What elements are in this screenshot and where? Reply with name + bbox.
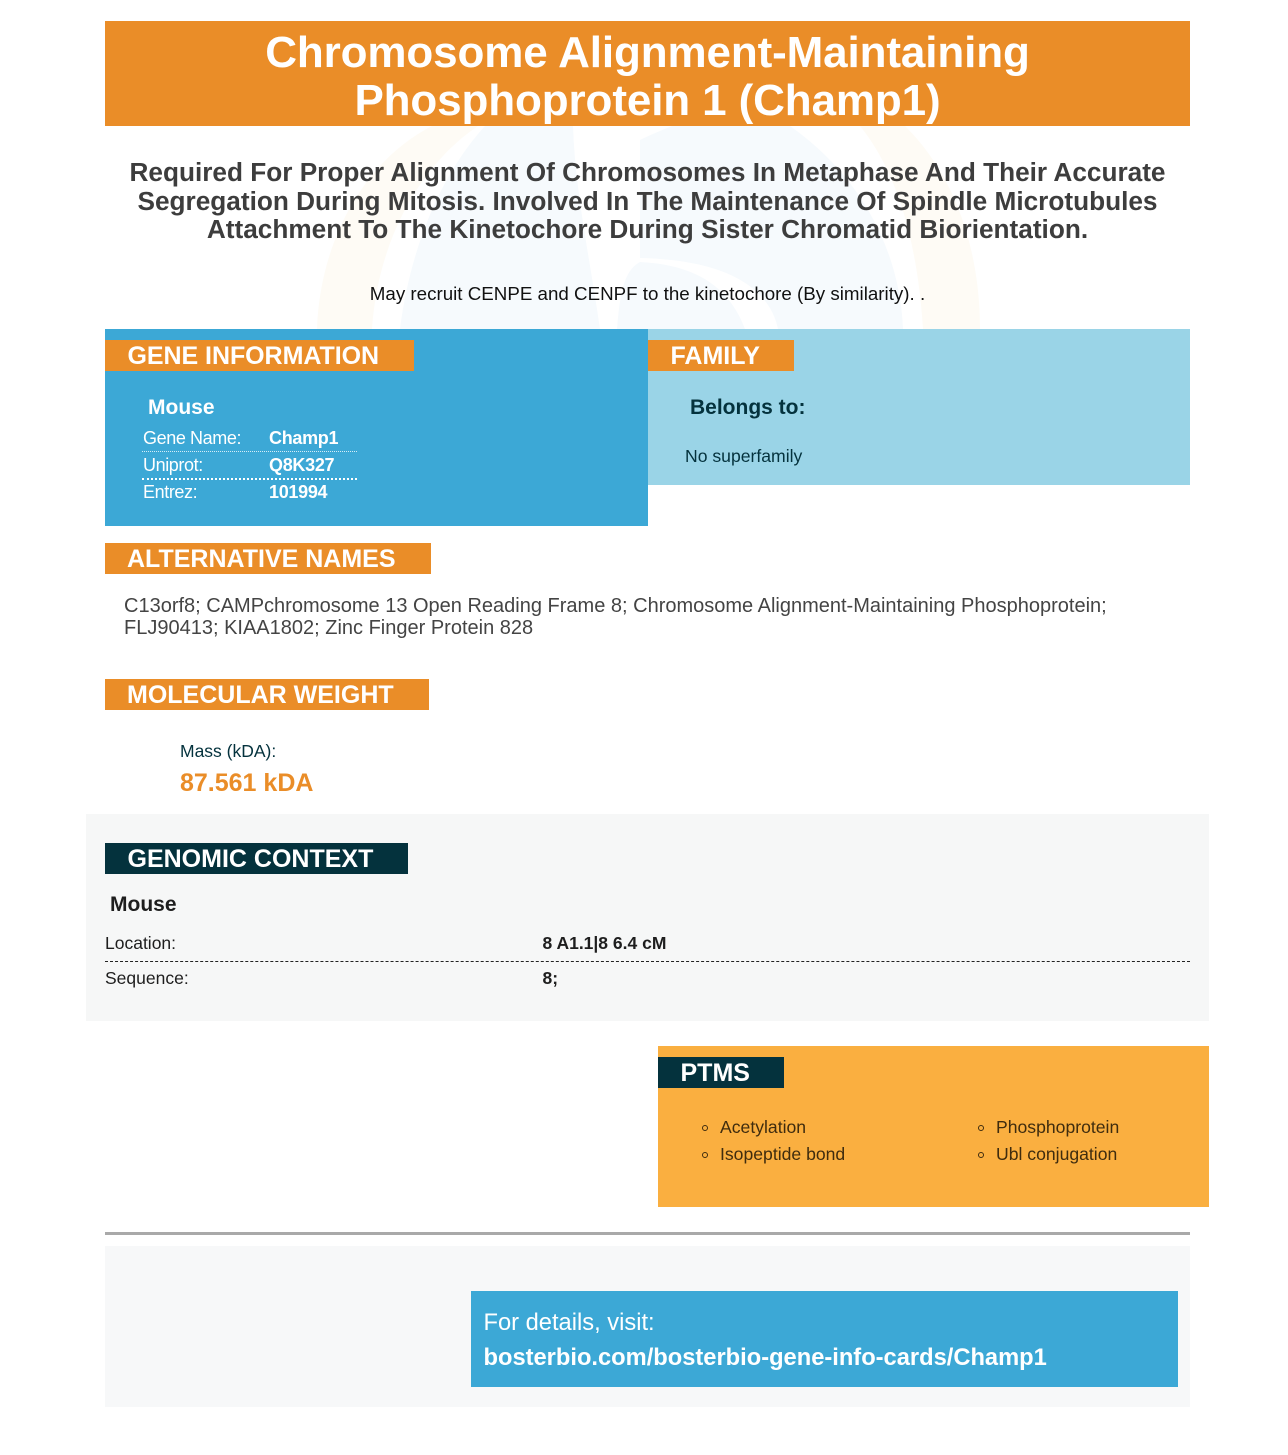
item: phosphoprotein: Phosphoprotein (996, 1117, 1119, 1137)
item: ubl conjugation: Ubl conjugation (996, 1144, 1117, 1164)
details URL: bosterbio.com/bosterbio-gene-info-cards/Champ1 (484, 1344, 1047, 1370)
gene detail table: Uniprot: (143, 455, 203, 475)
heading: molecular weight: MOLECULAR WEIGHT (127, 681, 394, 709)
heading: PTMs: PTMS (680, 1059, 750, 1087)
panel: gene information (105, 329, 648, 526)
gene detail table (142, 428, 357, 502)
gene detail table: Champ1 (269, 428, 338, 448)
heading: family: FAMILY (670, 342, 760, 370)
PTM list (702, 1117, 1119, 1164)
gene detail table: Entrez: (143, 482, 197, 502)
heading: alternative names: ALTERNATIVE NAMES (127, 545, 396, 573)
species label: Mouse (148, 396, 215, 419)
heading: PTMs (658, 1057, 784, 1088)
alternative names text (124, 595, 1107, 639)
genomic sequence row (105, 968, 558, 988)
title banner (105, 21, 1190, 126)
item: isopeptide bond: Isopeptide bond (720, 1144, 845, 1164)
title banner: Chromosome Alignment-Maintaining (265, 28, 1030, 77)
species label: Mouse (110, 893, 177, 916)
call to action box (471, 1291, 1178, 1387)
gene detail table: Gene Name: (143, 428, 241, 448)
function summary heading (129, 157, 1166, 244)
background watermark logo (317, 126, 980, 329)
item: acetylation: Acetylation (720, 1117, 806, 1137)
gene detail table: Q8K327 (269, 455, 334, 475)
gene detail table: 101994 (269, 482, 327, 502)
genomic location row: Location: (105, 933, 176, 953)
genomic location row (105, 933, 1190, 962)
function summary heading: Attachment To The Kinetochore During Sister Chromatid Biorientation. (207, 214, 1088, 244)
mass label: Mass (kDA): (180, 741, 276, 761)
superfamily value: No superfamily (685, 446, 802, 466)
footer panel (105, 1246, 1190, 1407)
genomic sequence row: Sequence: (105, 968, 189, 988)
title banner: Phosphoprotein 1 (Champ1) (354, 76, 941, 124)
belongs to label: Belongs to: (690, 396, 806, 419)
alternative names text: C13orf8; CAMPchromosome 13 Open Reading Frame 8; Chromosome Alignment-Maintaining Phosphoprotein; (124, 595, 1107, 617)
panel: PTMs (658, 1046, 1209, 1207)
function summary heading: Segregation During Mitosis. Involved In The Maintenance Of Spindle Microtubules (138, 186, 1157, 216)
heading: gene information: GENE INFORMATION (128, 342, 379, 370)
genomic location row: 8 A1.1|8 6.4 cM (542, 933, 666, 953)
mass value: 87.561 kDA (180, 769, 313, 797)
alternative names text: FLJ90413; KIAA1802; Zinc Finger Protein 828 (124, 617, 533, 639)
panel: genomic context (86, 814, 1209, 1021)
visit label: For details, visit: (484, 1310, 655, 1336)
genomic sequence row: 8; (542, 968, 558, 988)
function note: May recruit CENPE and CENPF to the kinetochore (By similarity). . (370, 283, 925, 304)
panel: family (648, 329, 1190, 485)
heading: genomic context: GENOMIC CONTEXT (128, 845, 373, 873)
heading: family (648, 340, 794, 371)
function summary heading: Required For Proper Alignment Of Chromosomes In Metaphase And Their Accurate (129, 157, 1166, 187)
